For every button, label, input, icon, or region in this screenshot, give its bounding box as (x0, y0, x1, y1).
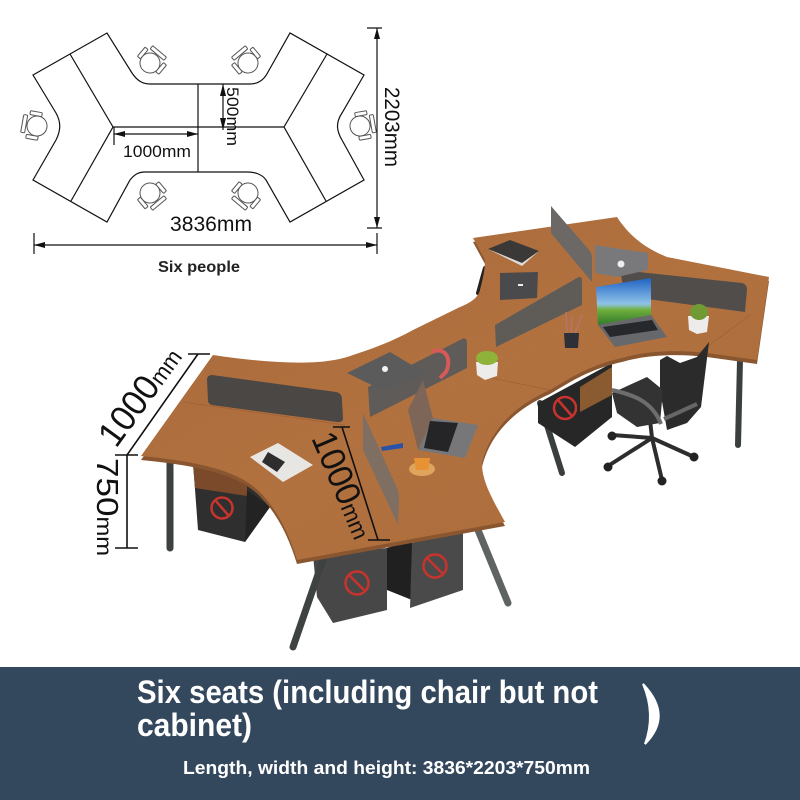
floor plan diagram (20, 28, 403, 276)
partition right (620, 270, 747, 312)
bottom banner (0, 667, 800, 800)
cabinet right (538, 363, 612, 447)
label 750mm: 750 mm (90, 458, 125, 556)
desk legs front (293, 530, 508, 647)
cabinet left (193, 462, 270, 542)
partition left (207, 375, 343, 422)
office chair (604, 342, 709, 486)
banner heading: cabinet) (137, 707, 252, 743)
laptop blue screen (596, 278, 667, 347)
closed laptop top (500, 272, 538, 300)
chair casters (604, 432, 698, 486)
plan: dimension arrows (34, 28, 382, 254)
coffee cup (409, 458, 435, 476)
plan: label 3836mm: 3836mm (170, 213, 252, 236)
plan: label 1000mm: 1000mm (123, 143, 191, 161)
chair base (608, 420, 694, 480)
pencil cup (564, 312, 582, 348)
label 1000mm centre: 1000mm (304, 426, 383, 544)
phone and cable (381, 443, 403, 451)
chair lumbar band (664, 404, 697, 419)
chair back (660, 342, 709, 430)
label 1000mm top left: 1000mm (89, 337, 189, 454)
desk legs back (170, 268, 740, 548)
banner background (0, 667, 800, 800)
magazine top (488, 240, 539, 266)
banner dimensions line: Length, width and height: 3836*2203*750mm (183, 757, 590, 778)
closing parenthesis mark (643, 684, 659, 744)
desk top (141, 217, 769, 564)
chair seat (612, 377, 663, 427)
plan: label 500mm: 500mm (223, 87, 242, 146)
laptop lid back (595, 245, 648, 277)
partition front (363, 413, 399, 525)
chair arm (612, 390, 661, 424)
partition centre (368, 338, 467, 417)
headset (432, 351, 448, 378)
cabinets front (313, 530, 463, 623)
partition top (551, 206, 592, 282)
banner heading (137, 674, 598, 743)
plan: label 2203mm: 2203mm (380, 87, 403, 167)
plant pot right (688, 304, 709, 334)
plan: desk outline (33, 33, 364, 222)
closed laptop centre (347, 352, 425, 390)
dimension lines on photo (115, 354, 390, 548)
plan: caption six people: Six people (158, 259, 240, 276)
magazine left (250, 443, 313, 482)
partition mid (495, 277, 582, 347)
plant pot centre (476, 351, 498, 380)
plan: chairs (20, 43, 377, 213)
open laptop left (408, 380, 478, 458)
banner heading: Six seats (including chair but not (137, 674, 598, 710)
desk photo (89, 206, 769, 647)
